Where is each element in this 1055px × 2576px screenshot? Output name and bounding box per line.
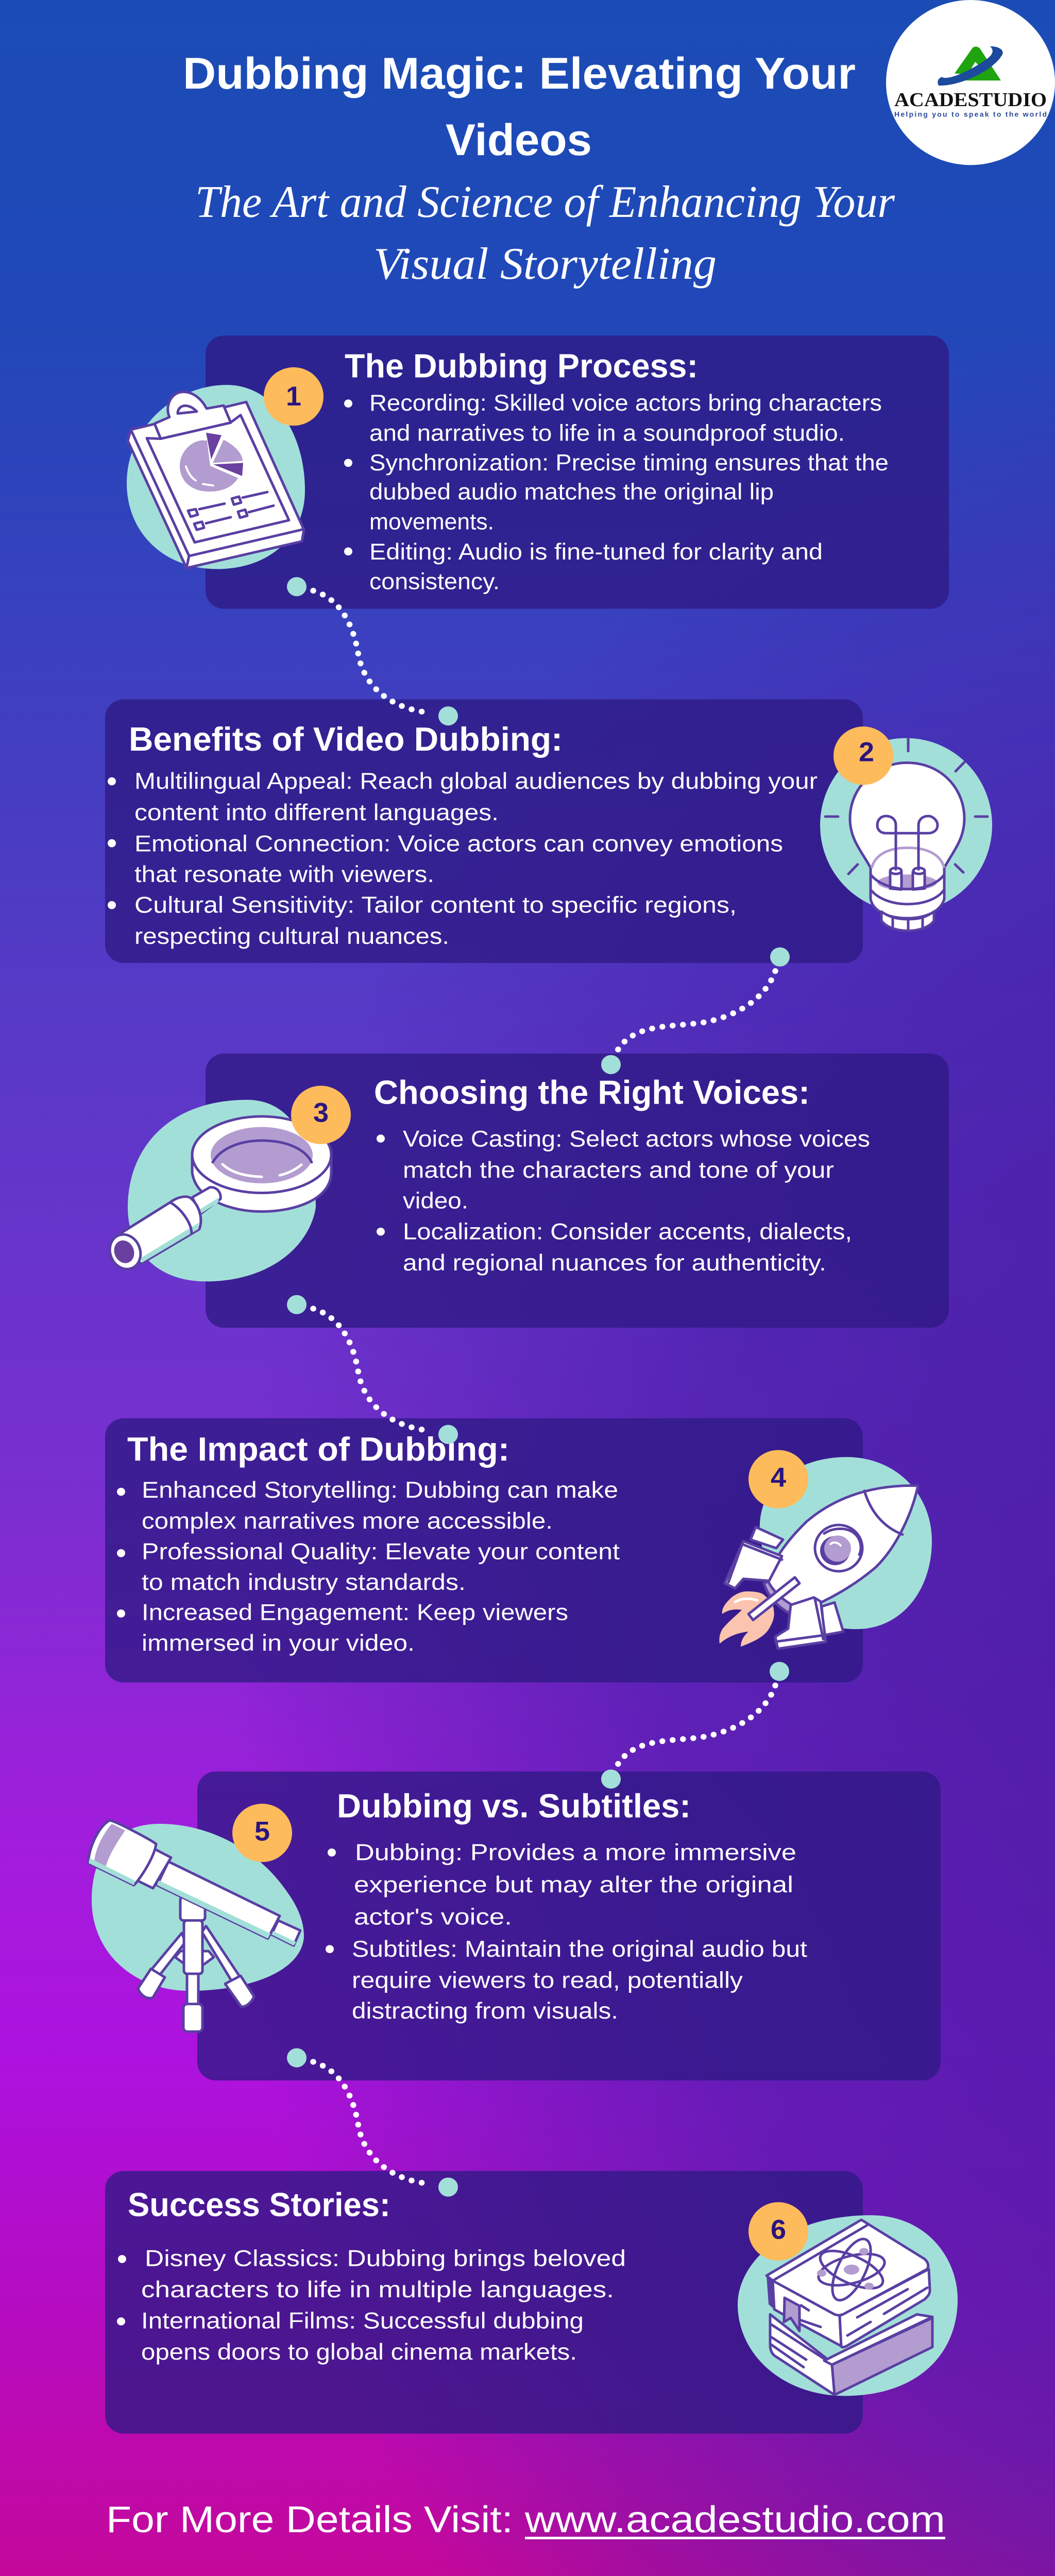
lower book [770,2314,932,2395]
bullet list: immersed in your video. [142,1630,415,1656]
atom symbol [815,2234,888,2306]
bullet list [344,389,889,594]
bullet list: movements. [369,509,494,534]
upper book [767,2220,930,2347]
bullet list [117,1477,620,1656]
bullet list: opens doors to global cinema markets. [141,2339,577,2365]
bullet list [108,768,818,949]
bullet list: Voice Casting: Select actors whose voices [403,1126,870,1151]
footer [106,2499,945,2540]
bullet list: characters to life in multiple languages. [141,2276,614,2302]
bullet list [117,2245,626,2365]
bullet list: Dubbing: Provides a more immersive [355,1839,796,1865]
bullet list: Synchronization: Precise timing ensures that the [369,450,889,476]
bullet list: Professional Quality: Elevate your content [142,1538,620,1564]
icon: light bulb [820,738,992,931]
badge 6: 6 [771,2215,786,2245]
panel: benefits of video dubbing [105,699,863,963]
bullet list [326,1839,807,2024]
heading: Benefits of Video Dubbing: [129,721,563,758]
badge 6 [748,2202,808,2261]
icon: clipboard with pie chart [127,385,305,569]
bullet list: video. [403,1188,468,1214]
logo: ACADESTUDIO [894,89,1047,111]
bullet list: Increased Engagement: Keep viewers [142,1599,568,1625]
icon: telescope [89,1820,304,2031]
heading: Dubbing vs. Subtitles: [337,1787,691,1824]
icon: magnifying glass [105,1100,331,1281]
connector 3 [287,1295,458,1444]
badge 1 [264,367,324,426]
tripod [138,1897,254,2031]
badge 5: 5 [254,1817,270,1846]
badge 5 [232,1804,292,1862]
bullet list: Disney Classics: Dubbing brings beloved [145,2245,626,2271]
connector 1 [287,577,458,725]
bullet list: Localization: Consider accents, dialects, [403,1218,852,1244]
bullet list: experience but may alter the original [354,1871,793,1897]
bullet list: Editing: Audio is fine-tuned for clarity and [369,538,823,565]
bullet list: match the characters and tone of your [403,1157,834,1183]
connector 5 [287,2048,458,2197]
barrel [89,1820,300,1945]
bullet list: require viewers to read, potentially [352,1967,743,1993]
badge 3: 3 [313,1098,329,1128]
bullet list: respecting cultural nuances. [134,923,449,949]
flame [719,1591,774,1647]
footer: For More Details Visit: [106,2499,513,2540]
bullet list: complex narratives more accessible. [142,1507,553,1534]
badge 2: 2 [859,737,874,767]
bullet list: International Films: Successful dubbing [141,2308,584,2333]
bullet list: content into different languages. [134,799,499,825]
logo [886,0,1055,165]
bullet list: Multilingual Appeal: Reach global audiences by dubbing your [134,768,818,794]
bullet list: dubbed audio matches the original lip [369,479,774,505]
bullet list: Emotional Connection: Voice actors can convey emotions [134,831,783,856]
badge 1: 1 [286,382,301,412]
subtitle: Visual Storytelling [373,239,717,289]
badge 4: 4 [771,1463,786,1493]
subtitle [195,177,895,289]
heading: The Impact of Dubbing: [127,1431,509,1468]
bullet list: Recording: Skilled voice actors bring characters [369,389,882,416]
bullet list: Cultural Sensitivity: Tailor content to specific regions, [134,892,737,918]
bullet list: consistency. [369,568,500,594]
bullet list: that resonate with viewers. [134,861,434,887]
heading: The Dubbing Process: [345,347,698,384]
title [183,49,856,165]
panel: dubbing vs subtitles [197,1771,941,2080]
panel: the impact of dubbing [105,1418,863,1683]
subtitle: The Art and Science of Enhancing Your [195,177,895,227]
bullet list: and regional nuances for authenticity. [403,1249,826,1276]
panel: choosing the right voices [206,1054,949,1328]
bullet list: distracting from visuals. [352,1997,618,2024]
heading: Success Stories: [128,2186,390,2224]
connector 4 [601,1662,789,1789]
badge 3 [291,1086,351,1144]
bullet list: and narratives to life in a soundproof studio. [369,420,845,446]
connector 2 [601,947,790,1074]
bullet list [377,1126,870,1276]
title: Videos [446,115,592,165]
bullet list: to match industry standards. [142,1569,466,1595]
bullet list: Enhanced Storytelling: Dubbing can make [142,1477,618,1503]
footer: www.acadestudio.com [524,2499,945,2540]
badge 4 [748,1450,808,1509]
icon: rocket [719,1457,932,1649]
bullet list: Subtitles: Maintain the original audio but [352,1936,807,1962]
bullet list: actor's voice. [354,1904,512,1929]
panel: success stories [105,2171,863,2434]
logo: Helping you to speak to the world [894,110,1047,118]
title: Dubbing Magic: Elevating Your [183,49,856,98]
panel: the dubbing process [206,335,949,609]
heading: Choosing the Right Voices: [374,1074,810,1111]
badge 2 [833,726,893,785]
icon: stack of books [738,2215,958,2396]
